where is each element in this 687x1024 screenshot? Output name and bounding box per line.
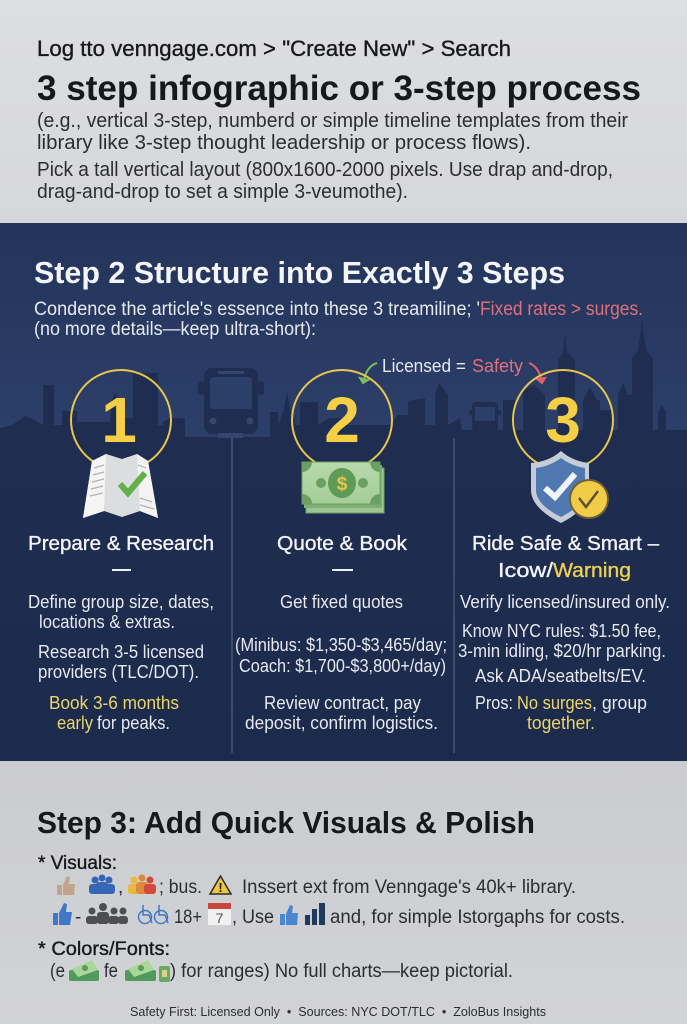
column dividers	[232, 438, 454, 753]
label: visuals: * Visuals:	[38, 853, 117, 874]
badge: number 3	[513, 370, 613, 470]
text: template examples: library like 3-step thought leadership or process flows).	[37, 132, 531, 154]
icon: blue people	[89, 874, 115, 894]
icon: small bus silhouette	[469, 402, 501, 431]
text: step 1 details: early	[57, 713, 93, 733]
text: step 2 intro: (no more details—keep ultra-short):	[34, 319, 316, 340]
heading: quote and book: Quote & Book	[277, 533, 408, 555]
text: step 2 intro	[34, 299, 643, 340]
text: step 3 details: Pros:	[475, 693, 513, 713]
text: layout advice	[37, 159, 613, 203]
text: step 1 details: Define group size, dates,	[28, 592, 214, 612]
badge: number 1	[71, 370, 171, 470]
text: step 2 details	[235, 592, 447, 733]
icon: yellow and red people	[128, 874, 156, 894]
heading: quote and book	[277, 533, 408, 571]
text: step 1 details	[28, 592, 214, 733]
row: visuals line two: , Use	[232, 907, 274, 928]
icon: small banknote	[159, 966, 170, 982]
badge: number 1: 1	[101, 384, 137, 456]
icon: calendar: 7	[216, 910, 224, 926]
badge: number 2: 2	[324, 384, 360, 456]
icon: warning triangle: !	[218, 880, 223, 895]
icon: banknotes: $	[337, 474, 348, 495]
row: visuals line one: ,	[118, 877, 123, 898]
text: step 3 details	[458, 592, 670, 733]
text: step 3 details: Know NYC rules: $1.50 fee,	[462, 621, 661, 641]
text: step 3 details: No surges	[517, 693, 592, 713]
row: visuals line one: Inssert ext from Venngage's 40k+ library.	[242, 877, 576, 898]
text: step 2 intro: Condence the article's essence into these 3 treamiline; '	[34, 299, 480, 320]
badge: number 2	[292, 370, 392, 470]
row: visuals line two	[53, 903, 625, 928]
icon: bar chart	[305, 903, 325, 925]
text: step 2 details: Get fixed quotes	[280, 592, 403, 612]
icon: bus silhouette	[198, 368, 264, 438]
icon: thumbs up tan	[57, 876, 75, 895]
row: visuals line one: ; bus.	[159, 877, 202, 898]
icon: dark people	[86, 903, 128, 924]
text: step 1 details: Book 3-6 months	[49, 693, 179, 713]
text: log in instruction: Log tto venngage.com > "Create New" > Search	[37, 36, 511, 61]
row: visuals line one	[57, 874, 576, 898]
panel: step 2 navy section	[0, 223, 687, 761]
icon: money stack one	[69, 960, 99, 981]
heading: ride safe and smart: Warning	[553, 560, 631, 582]
row: visuals line two: -	[75, 907, 81, 928]
icon: map with check	[83, 454, 158, 518]
text: step 1 details: locations & extras.	[39, 612, 175, 632]
text: step 1 details: providers (TLC/DOT).	[38, 662, 199, 682]
text: step 2 intro: Fixed rates > surges.	[480, 299, 643, 320]
heading: prepare and research: Prepare & Research	[28, 533, 214, 555]
section: top instructions	[37, 36, 641, 203]
icon: wheelchair symbols	[138, 905, 168, 924]
text: template examples: (e.g., vertical 3-step, numberd or simple timeline templates from their	[37, 110, 628, 132]
icon: warning triangle	[210, 876, 231, 895]
callout: licensed equals safety	[360, 356, 545, 383]
section: step 3 visuals and polish	[37, 805, 625, 1019]
icon: shield with check	[531, 451, 608, 523]
callout: licensed equals safety: Safety	[472, 356, 523, 376]
heading: 3 step infographic: 3 step infographic or 3-step process	[37, 69, 641, 108]
text: template examples	[37, 110, 628, 154]
text: step 2 details: (Minibus: $1,350-$3,465/day;	[235, 635, 447, 655]
text: layout advice: Pick a tall vertical layout (800x1600-2000 pixels. Use drap and-drop,	[37, 159, 613, 181]
text: step 2 details: Review contract, pay	[264, 693, 421, 713]
heading: step 2: Step 2 Structure into Exactly 3 Steps	[34, 255, 565, 290]
text: step 2 details: Coach: $1,700-$3,800+/day)	[239, 656, 446, 676]
row: colors line: ) for ranges) No full charts—keep pictorial.	[170, 961, 513, 982]
label: colors and fonts: * Colors/Fonts:	[38, 939, 170, 960]
heading: ride safe and smart	[472, 533, 660, 582]
text: step 3 details: Ask ADA/seatbelts/EV.	[475, 666, 646, 686]
icon: thumbs up blue	[53, 903, 72, 925]
text: step 1 details: for peaks.	[97, 713, 170, 733]
row: visuals line two: 18+	[174, 907, 202, 928]
icon: calendar	[208, 903, 231, 926]
row: colors line: fe	[104, 961, 118, 982]
heading: step 3: Step 3: Add Quick Visuals & Polish	[37, 805, 535, 840]
icon: banknotes	[302, 462, 384, 513]
badge: number 3: 3	[545, 384, 581, 456]
text: step 1 details: Research 3-5 licensed	[38, 642, 204, 662]
step 2 column	[235, 370, 447, 733]
heading: ride safe and smart: Ride Safe & Smart –	[472, 533, 660, 555]
text: step 3 details: , group	[592, 693, 647, 713]
text: step 2 details: deposit, confirm logistics.	[245, 713, 438, 733]
heading: ride safe and smart: Icow/	[498, 560, 554, 582]
step 1 column	[28, 370, 214, 733]
icon: money stack two	[125, 960, 156, 981]
text: step 3 details: 3-min idling, $20/hr parking.	[458, 641, 666, 661]
row: visuals line two: and, for simple Istorgaphs for costs.	[330, 907, 625, 928]
icon: thumbs up small	[280, 905, 298, 925]
skyline background	[0, 320, 687, 761]
footer: Safety First: Licensed Only • Sources: NYC DOT/TLC • ZoloBus Insights	[130, 1005, 546, 1019]
text: step 3 details: Verify licensed/insured only.	[460, 592, 670, 612]
row: colors line	[50, 960, 513, 982]
step 3 column	[458, 370, 670, 733]
text: step 3 details: together.	[527, 713, 595, 733]
row: colors line: (e	[50, 961, 65, 982]
callout: licensed equals safety: Licensed =	[382, 356, 466, 376]
text: layout advice: drag-and-drop to set a simple 3-veumothe).	[37, 181, 408, 203]
